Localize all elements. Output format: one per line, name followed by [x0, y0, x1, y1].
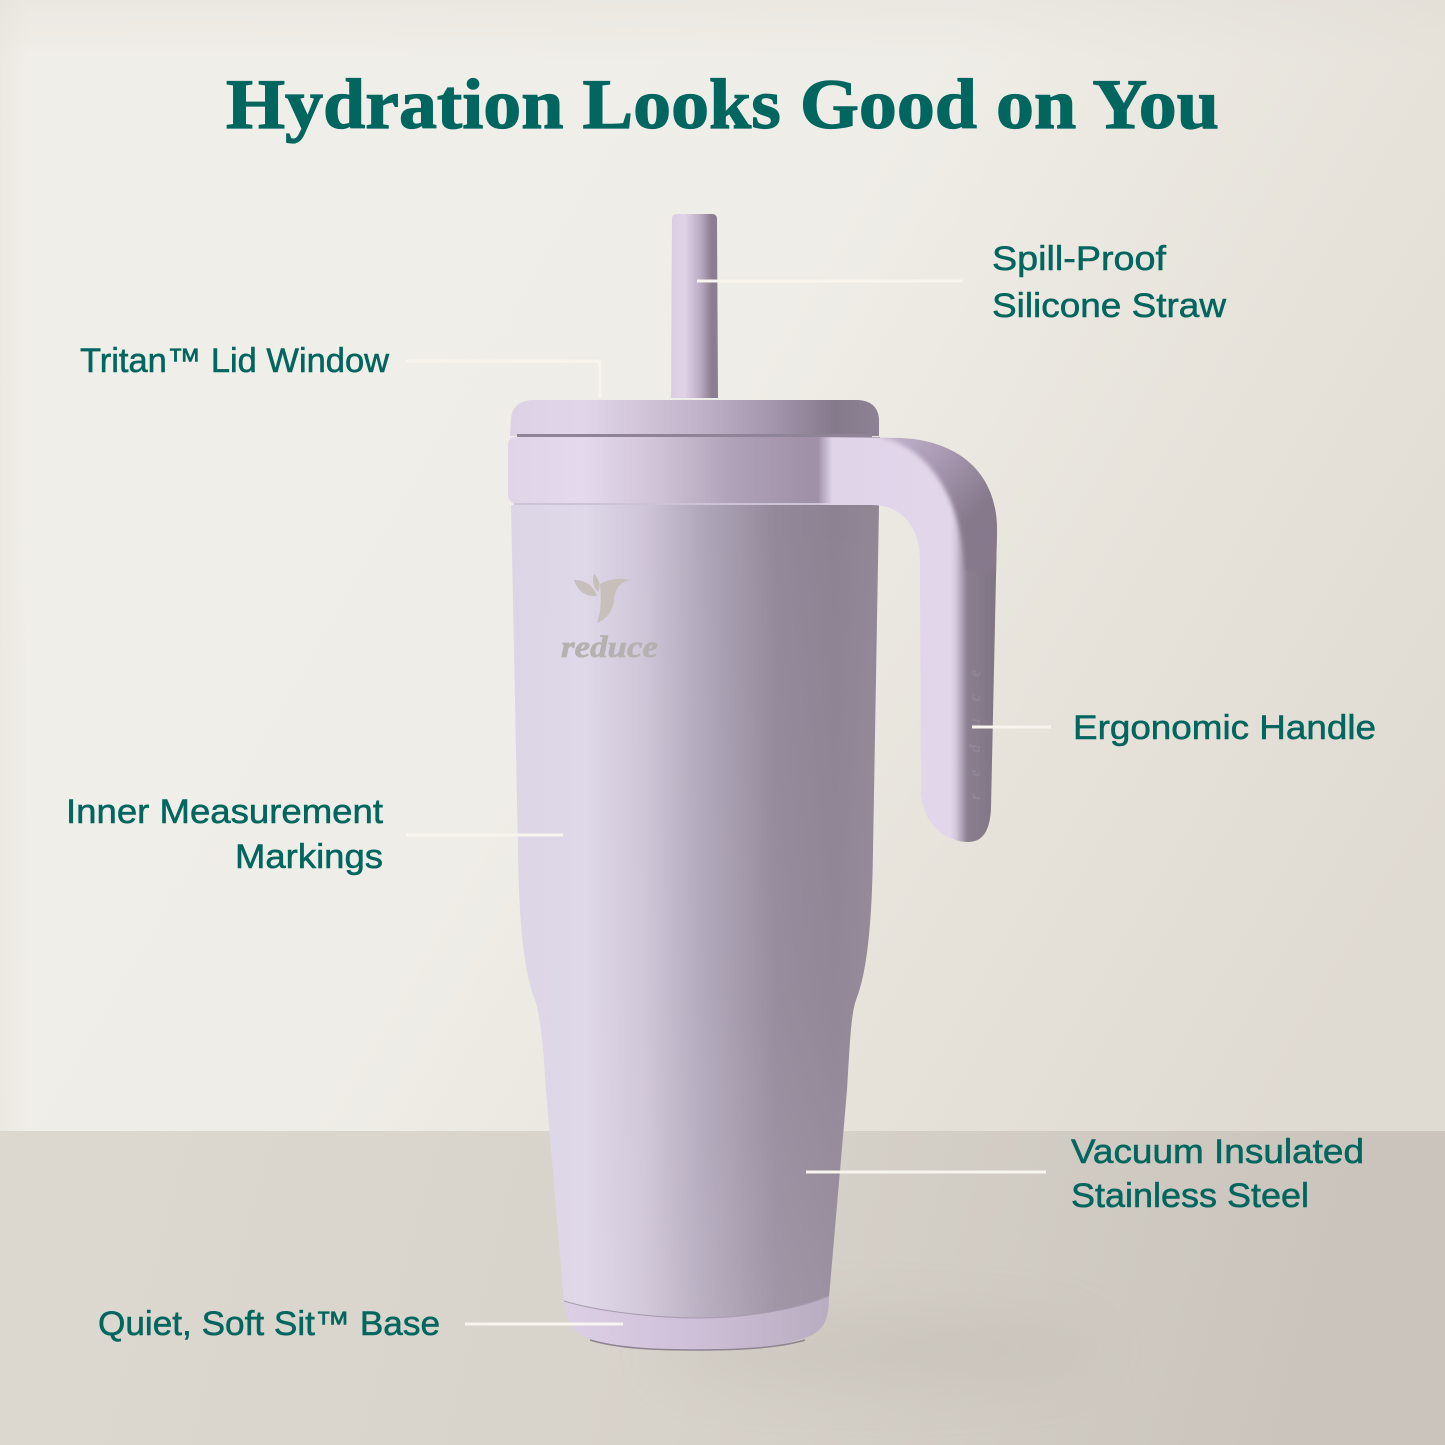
- floor surface: [0, 1131, 1445, 1445]
- leader line: [406, 361, 600, 398]
- handle embossed text: reduce: [967, 670, 984, 800]
- lid: [510, 400, 879, 436]
- callout: lid window: [80, 342, 600, 398]
- callout: vacuum insulated: [806, 1133, 1364, 1215]
- label: Markings: [235, 838, 383, 876]
- callout: spill-proof straw: [697, 240, 1226, 325]
- label: Inner Measurement: [66, 793, 384, 831]
- floor shadow: [660, 1320, 1100, 1380]
- label: Silicone Straw: [992, 287, 1226, 325]
- leader line: [806, 1170, 1046, 1174]
- leader line: [406, 834, 563, 836]
- label: Tritan™ Lid Window: [80, 342, 389, 380]
- straw: [671, 214, 718, 398]
- label: Ergonomic Handle: [1073, 709, 1376, 747]
- lid seam: [517, 434, 872, 437]
- logo: [561, 574, 658, 664]
- soft sit base: [564, 1296, 829, 1350]
- label: [992, 240, 1226, 325]
- logo mark: [574, 574, 630, 623]
- handle: [820, 437, 997, 842]
- label: Vacuum Insulated: [1071, 1133, 1364, 1171]
- label: [1071, 1133, 1364, 1215]
- collar: [508, 437, 880, 504]
- leader line: [465, 1322, 623, 1326]
- leader line: [697, 280, 963, 282]
- tumbler: [508, 214, 1005, 1350]
- collar seam: [514, 503, 880, 505]
- label: Spill-Proof: [992, 240, 1167, 278]
- label: Stainless Steel: [1071, 1177, 1309, 1215]
- callout: measurement markings: [66, 793, 563, 876]
- logo wordmark: reduce: [561, 629, 658, 664]
- background wall: [0, 0, 1445, 1131]
- title: Hydration Looks Good on You: [226, 66, 1219, 144]
- leader line: [972, 726, 1051, 728]
- tumbler body: [511, 505, 879, 1320]
- label: [66, 793, 384, 876]
- label: Quiet, Soft Sit™ Base: [98, 1305, 440, 1343]
